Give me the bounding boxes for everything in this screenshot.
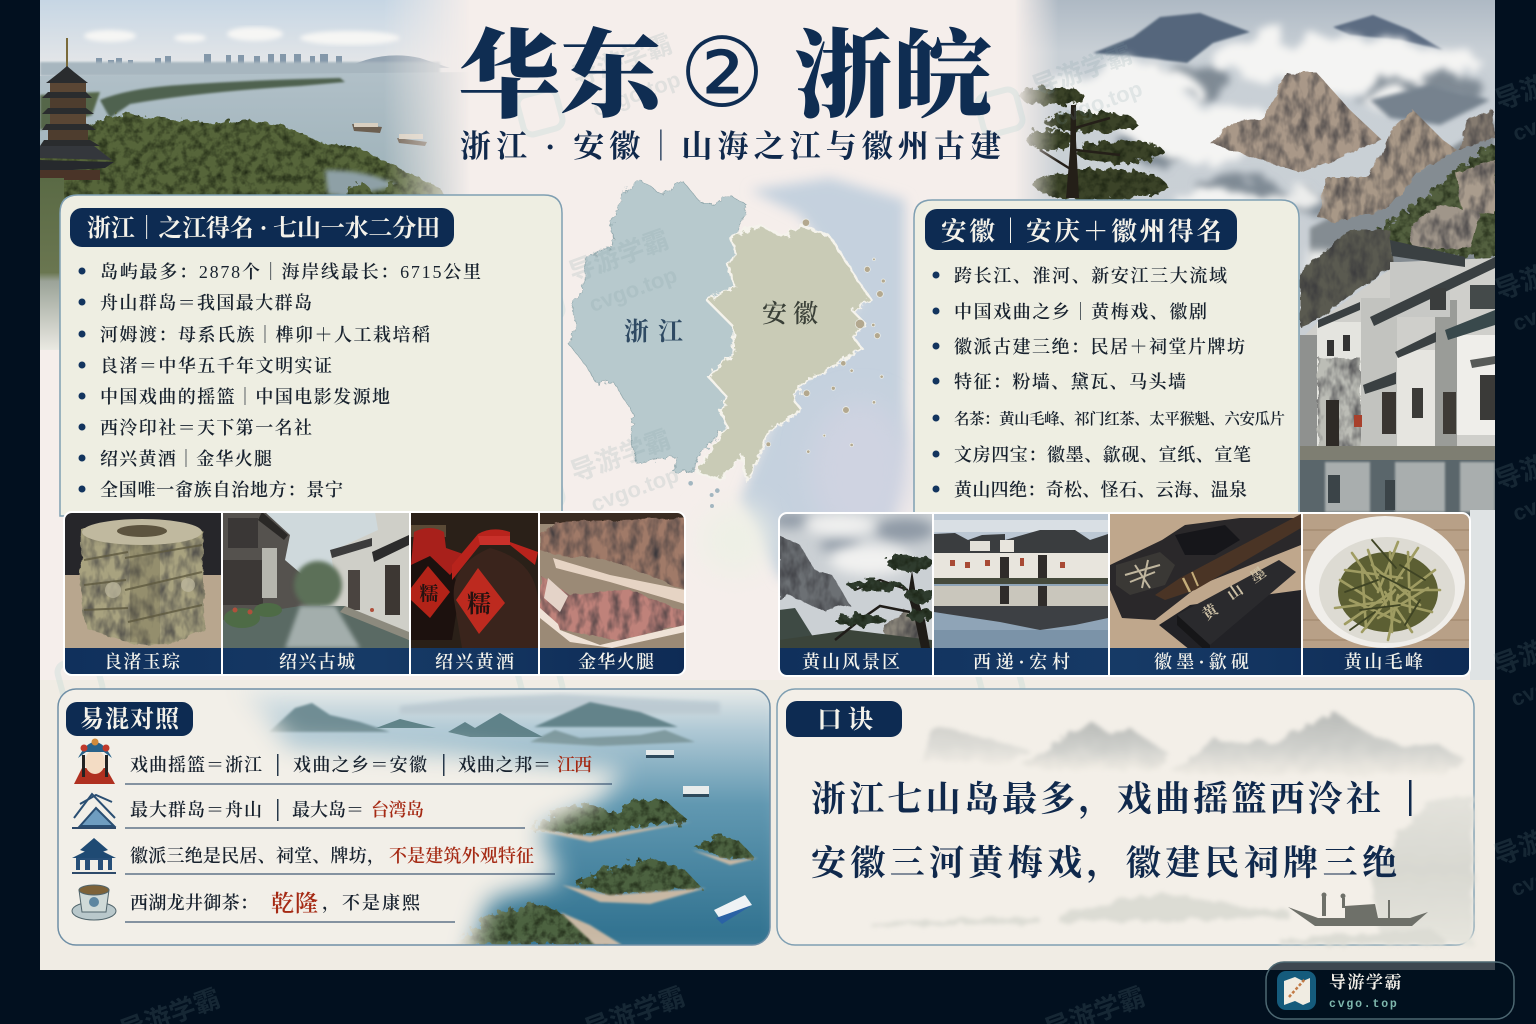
watermarks: cvgo.top [1051,76,1146,131]
image: sea wash behind map [700,178,1495,680]
mnemonic verse [811,780,1412,884]
row 3: Hui architecture [72,838,555,874]
watermarks: 导游学霸 [568,28,676,92]
row 4: Longjing tea [72,885,455,922]
bullet list: Zhejiang facts: 河姆渡：母系氏族｜榫卯＋人工栽培稻 [100,324,430,345]
photo labels: Zhejiang: 绍兴古城 [279,652,355,672]
bullet list: Zhejiang facts: 西泠印社＝天下第一名社 [100,418,312,438]
subtitle: 浙江 · 安徽｜山海之江与徽州古建 [460,129,1001,164]
Hui village buildings [1300,240,1495,520]
photo: Xidi Hongcun [934,513,1108,650]
heading: Zhejiang: 浙江｜之江得名 · 七山一水二分田 [87,215,440,242]
photo labels: Anhui [780,648,1469,675]
bullet list: Anhui facts [932,266,1285,500]
photo: Shaoxing old town [223,513,409,648]
photo labels: Anhui: 徽墨·歙砚 [1154,652,1249,672]
heading: mnemonic [786,701,902,737]
bullet list: Zhejiang facts: 岛屿最多：2878个｜海岸线最长：6715公里 [100,262,481,282]
image: forest strip on the left edge [40,178,64,350]
map: islets [766,219,885,453]
photo: Hui ink and She inkstone: 黄 [1199,599,1223,624]
bullet list: Zhejiang facts: 全国唯一畲族自治地方：景宁 [100,479,343,500]
trees [36,114,450,205]
title [458,17,992,130]
photo: Hui ink and She inkstone [1110,514,1301,648]
photo labels: Zhejiang [65,648,684,674]
bullet list: Zhejiang facts: 绍兴黄酒｜金华火腿 [100,449,272,469]
image: Zhoushan islands seascape [248,690,770,944]
bullet list: Anhui facts: 徽派古建三绝：民居＋祠堂片牌坊 [954,337,1245,357]
photo labels: Anhui: 西递·宏村 [973,652,1070,672]
photo strip: Zhejiang [64,512,685,675]
image: West Lake scene with pagoda [36,0,470,212]
heading: Anhui [925,209,1237,250]
bullet list: Zhejiang facts: 良渚＝中华五千年文明实证 [100,355,332,376]
bullet list: Anhui facts: 中国戏曲之乡｜黄梅戏、徽剧 [954,301,1207,322]
bullet list: Zhejiang facts: 中国戏曲的摇篮｜中国电影发源地 [100,387,390,407]
photo: Huangshan scenery [780,514,932,648]
watermarks: 导游学霸 [565,224,673,288]
bullet list: Zhejiang facts [78,262,481,500]
icon: map logo [1277,971,1316,1010]
pine tree [1020,87,1166,201]
panel: easily confused facts [58,689,770,945]
photo: Hui ink and She inkstone: 墨 [1247,564,1270,587]
map: Zhejiang and Anhui [568,180,885,508]
image: Huangshan mountains and Hui village [1015,0,1500,520]
watermarks: 导游学霸 [1028,798,1136,862]
icon: tea cup [72,885,116,920]
watermarks: cvgo.top [586,262,680,317]
photo labels: Anhui: 黄山风景区 [802,652,900,672]
row 3: Hui architecture: 徽派三绝是民居、祠堂、牌坊， [130,846,385,867]
icon: opera character [74,738,115,784]
photo: Shaoxing yellow wine: 糯 [467,591,491,618]
photo labels: Zhejiang: 绍兴黄酒 [435,652,514,672]
map: Anhui region [697,225,870,480]
row 2: islands [72,794,525,828]
row 1: opera: 戏曲之乡＝安徽 [293,754,427,775]
row 1: opera [74,738,612,784]
bullet list: Anhui facts: 名茶：黄山毛峰、祁门红茶、太平猴魁、六安瓜片 [954,409,1285,428]
photo: Shaoxing yellow wine [411,513,538,648]
heading: Anhui: 安徽｜安庆＋徽州得名 [941,217,1222,246]
watermarks: 导游学霸 [1028,38,1136,102]
row 3: Hui architecture: 不是建筑外观特征 [389,846,534,866]
panel: Zhejiang [60,195,562,516]
photo: Hui ink and She inkstone: 山 [1224,581,1246,604]
map label: Zhejiang: 浙江 [624,318,683,346]
photo strip: Anhui [770,512,1470,676]
bullet list: Anhui facts: 文房四宝：徽墨、歙砚、宣纸、宣笔 [954,445,1251,465]
icon: fishing boat [1288,892,1428,926]
watermarks: cvgo.top [589,67,684,121]
heading: Zhejiang [70,208,454,247]
row 4: Longjing tea: 西湖龙井御茶： [130,893,258,913]
cliffs [1210,73,1495,223]
bullet list: Anhui facts: 黄山四绝：奇松、怪石、云海、温泉 [954,480,1247,500]
watermarks: 导游学霸 [567,424,675,487]
watermarks: cvgo.top [1051,836,1146,891]
panel: mnemonic [777,689,1474,945]
heading: easily confused [66,702,193,736]
photo: Shaoxing yellow wine: 糯 [419,583,439,605]
panel: Anhui [914,200,1299,516]
mnemonic verse: 浙江七山岛最多，戏曲摇篮西泠社 [811,780,1381,820]
bullet list: Zhejiang facts: 舟山群岛＝我国最大群岛 [100,293,312,313]
footer brand badge: 导游学霸 [1329,973,1403,992]
photo: Huangshan Maofeng tea [1303,514,1469,648]
footer brand badge [1266,962,1514,1019]
bullet list: Anhui facts: 跨长江、淮河、新安江三大流域 [954,266,1227,286]
map: Zhejiang region [568,180,747,472]
row 4: Longjing tea: ，不是康熙 [322,893,421,914]
image: ink landscape [870,712,1473,944]
photo: Liangzhu jade cong [65,513,221,648]
map label: Anhui: 安徽 [762,300,818,328]
heading: easily confused: 易混对照 [80,706,181,733]
photo strip frames [64,512,1470,676]
row 1: opera: 戏曲之邦＝ [458,755,551,775]
title: 浙皖 [794,23,992,130]
title: ② [679,17,765,129]
icon: mountain and sea [72,794,116,828]
icon: Leifeng pagoda [40,38,114,180]
row 1: opera: 江西 [557,755,592,775]
photo labels: Anhui: 黄山毛峰 [1344,652,1423,672]
photo labels: Zhejiang: 金华火腿 [578,652,654,672]
row 2: islands: 最大群岛＝舟山 [130,800,262,820]
title: 华东 [458,23,670,130]
icon: ancestral hall [72,838,116,874]
bullet list: Anhui facts: 特征：粉墙、黛瓦、马头墙 [954,371,1186,392]
row 2: islands: 最大岛＝ [292,800,364,820]
row 1: opera: 戏曲摇篮＝浙江 [130,755,262,775]
row 2: islands: 台湾岛 [371,800,424,820]
photo labels: Zhejiang: 良渚玉琮 [104,652,181,672]
heading: mnemonic: 口诀 [817,706,873,734]
row 4: Longjing tea: 乾隆 [271,891,318,916]
footer brand badge: cvgo.top [1329,998,1399,1011]
watermarks: cvgo.top [587,462,682,517]
mnemonic verse: 安徽三河黄梅戏，徽建民祠牌三绝 [811,844,1397,884]
photo: Jinhua ham [540,513,684,648]
